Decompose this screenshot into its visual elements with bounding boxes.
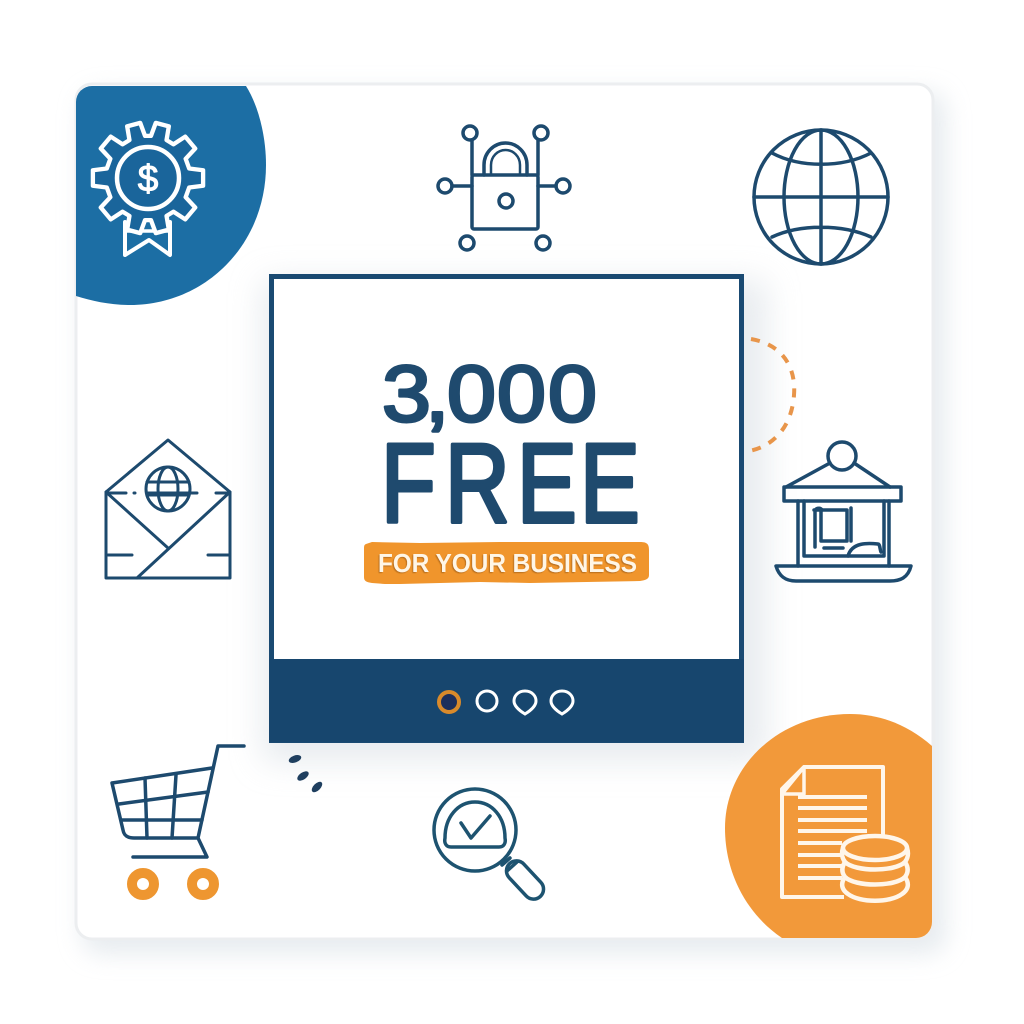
dashed orange arc (749, 339, 794, 451)
decorative dots (288, 753, 324, 794)
panel shadow (262, 280, 767, 762)
blue corner shape (76, 86, 266, 305)
icon: shopping cart (112, 746, 244, 895)
card shadow (82, 92, 946, 954)
icon: bank building (776, 442, 911, 581)
main panel (269, 276, 744, 742)
panel footer bar (269, 659, 744, 742)
text: dollar sign: $ (138, 158, 158, 199)
card (76, 84, 933, 939)
icon: padlock network (438, 126, 570, 250)
tag text: FOR YOUR BUSINESS (378, 548, 637, 578)
icon: gear with dollar and ribbon (93, 123, 203, 255)
icon: document with coins (782, 767, 908, 901)
wheels (132, 873, 154, 895)
orange tag (364, 542, 649, 584)
headline: FREE: FREE (381, 422, 640, 546)
icon: magnifying glass with check (434, 789, 548, 903)
icon: envelope with globe (106, 440, 230, 578)
orange corner shape (725, 714, 932, 938)
icon: globe (754, 130, 888, 264)
carousel dots (439, 691, 573, 714)
headline: 3,000: 3,000 (382, 349, 597, 438)
